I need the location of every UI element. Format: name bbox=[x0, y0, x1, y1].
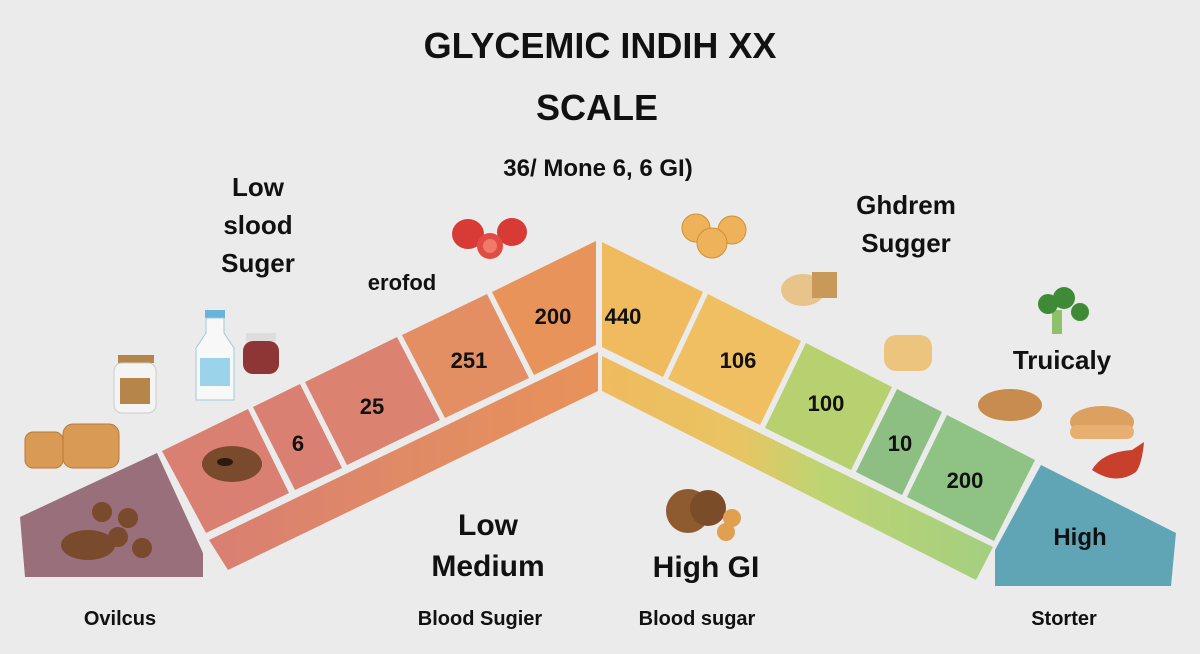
icon: cookies in purple block bbox=[61, 502, 152, 560]
icon: donut bbox=[202, 446, 262, 482]
upper cells left bbox=[162, 409, 289, 533]
heading: ghdrem sugger: Sugger bbox=[861, 228, 951, 258]
bottom labels: Ovilcus bbox=[84, 608, 156, 630]
heading: ghdrem sugger bbox=[856, 190, 956, 258]
lower band left bbox=[209, 352, 598, 570]
cell values: 10 bbox=[888, 431, 912, 456]
icon: meat bbox=[1092, 442, 1144, 479]
label: erofod: erofod bbox=[368, 270, 436, 295]
cell values: 200 bbox=[947, 468, 983, 493]
lower band right bbox=[602, 356, 993, 580]
subtitle: 36/ Mone 6, 6 GI) bbox=[503, 155, 693, 182]
label: low medium: Medium bbox=[431, 550, 545, 583]
label: high: High bbox=[1053, 524, 1107, 551]
icon: jar bbox=[114, 355, 156, 413]
title: GLYCEMIC INDIH XX bbox=[424, 25, 776, 66]
icon: cookie bbox=[978, 389, 1042, 421]
purple base block bbox=[20, 453, 203, 577]
icon: bread bbox=[781, 272, 837, 306]
icon: pancake stacks bbox=[25, 424, 119, 468]
scale: left ascending bbox=[20, 241, 598, 577]
icon: jam jar bbox=[243, 333, 279, 374]
title bbox=[424, 25, 776, 128]
icon: potatoes bbox=[682, 214, 746, 258]
cell values: 6 bbox=[292, 431, 304, 456]
heading: low blood sugar: slood bbox=[223, 210, 293, 240]
bottom labels: Blood Sugier bbox=[418, 608, 542, 630]
heading: low blood sugar bbox=[221, 172, 295, 278]
cell values: 100 bbox=[808, 391, 844, 416]
icon: tomatoes bbox=[452, 218, 527, 259]
upper cells right bbox=[602, 242, 703, 377]
cell values: 25 bbox=[360, 394, 384, 419]
cell values: 251 bbox=[451, 348, 487, 373]
heading: ghdrem sugger: Ghdrem bbox=[856, 190, 956, 220]
heading: low blood sugar: Suger bbox=[221, 248, 295, 278]
scale: right descending bbox=[602, 242, 1176, 586]
blue end block bbox=[995, 465, 1176, 586]
heading: low blood sugar: Low bbox=[232, 172, 285, 202]
label: high GI: High GI bbox=[653, 551, 759, 584]
icon: broccoli bbox=[1038, 287, 1089, 334]
bottom labels: Blood sugar bbox=[639, 608, 756, 630]
bottom labels: Storter bbox=[1031, 608, 1097, 630]
cell values: 106 bbox=[720, 348, 756, 373]
icon: milk bottle bbox=[196, 310, 234, 400]
icon: burger bun bbox=[1070, 406, 1134, 439]
title: SCALE bbox=[536, 87, 658, 128]
bottom labels bbox=[84, 608, 1097, 630]
cell values bbox=[292, 304, 983, 493]
label: low medium bbox=[431, 509, 545, 583]
icon: bun bbox=[884, 335, 932, 371]
label: low medium: Low bbox=[458, 509, 519, 542]
cell values: 440 bbox=[605, 304, 641, 329]
icon: apple and biscuits bbox=[666, 489, 741, 541]
label: truicaly: Truicaly bbox=[1013, 345, 1112, 375]
cell values: 200 bbox=[535, 304, 571, 329]
